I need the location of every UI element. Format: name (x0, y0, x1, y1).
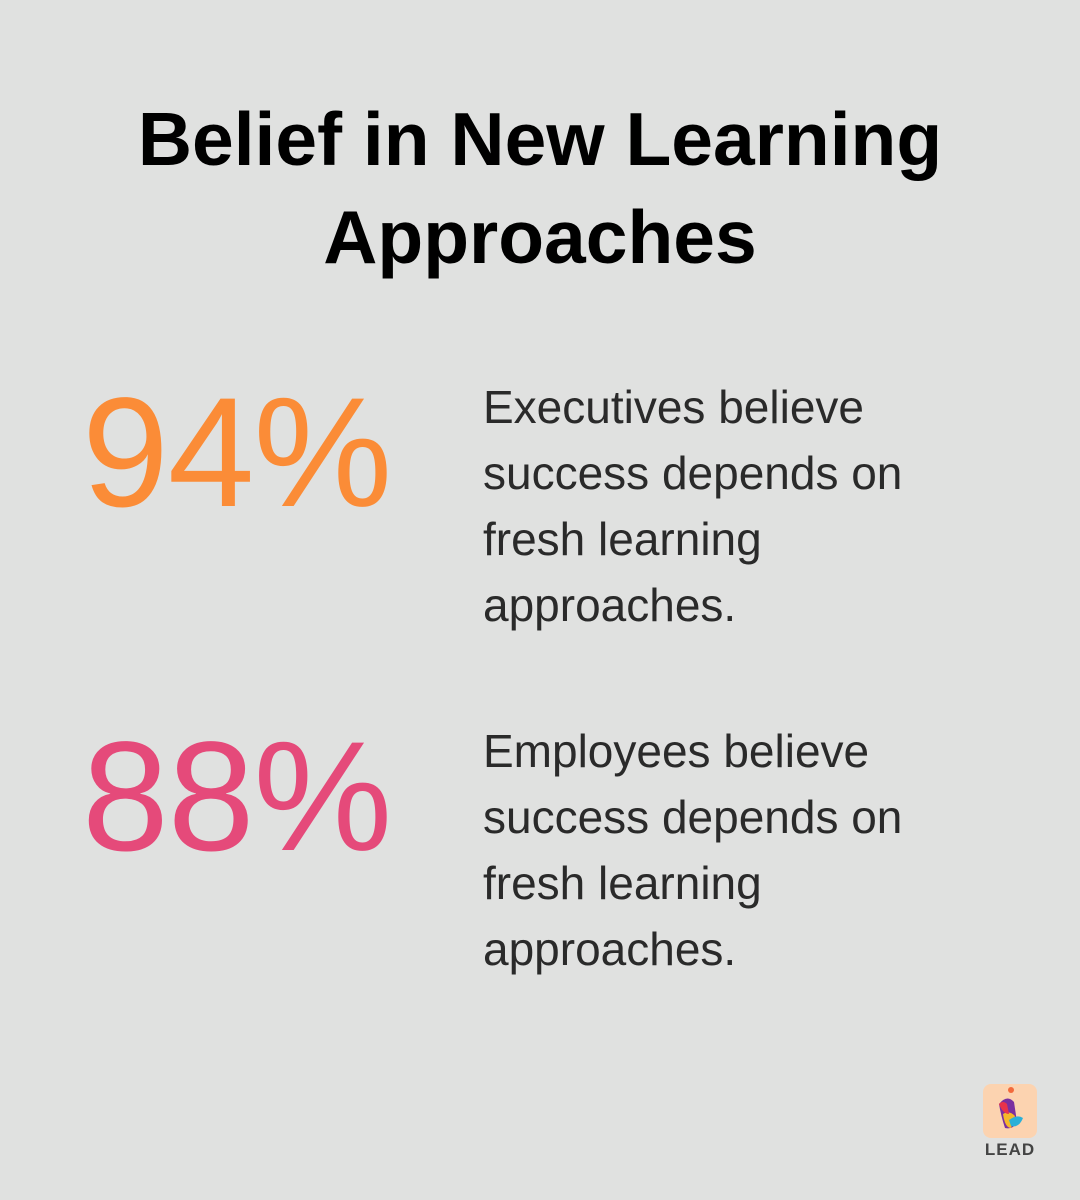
description: employees: fresh learning (483, 857, 762, 909)
logo: LEAD (983, 1084, 1037, 1159)
stat: employees (82, 710, 902, 975)
title (138, 97, 942, 279)
description: employees: success depends on (483, 791, 902, 843)
description: executives: approaches. (483, 579, 736, 631)
description: employees: Employees believe (483, 725, 869, 777)
number: 88%: 88% (82, 710, 391, 884)
description: executives: success depends on (483, 447, 902, 499)
description: employees (483, 725, 902, 975)
description: executives: fresh learning (483, 513, 762, 565)
stat: executives (82, 366, 902, 631)
title: Belief in New Learning (138, 97, 942, 181)
description: employees: approaches. (483, 923, 736, 975)
description: executives (483, 381, 902, 631)
number: 94%: 94% (82, 366, 391, 540)
title: Approaches (323, 195, 757, 279)
icon: logo mark (983, 1084, 1037, 1138)
logo text: LEAD (985, 1140, 1035, 1159)
description: executives: Executives believe (483, 381, 864, 433)
